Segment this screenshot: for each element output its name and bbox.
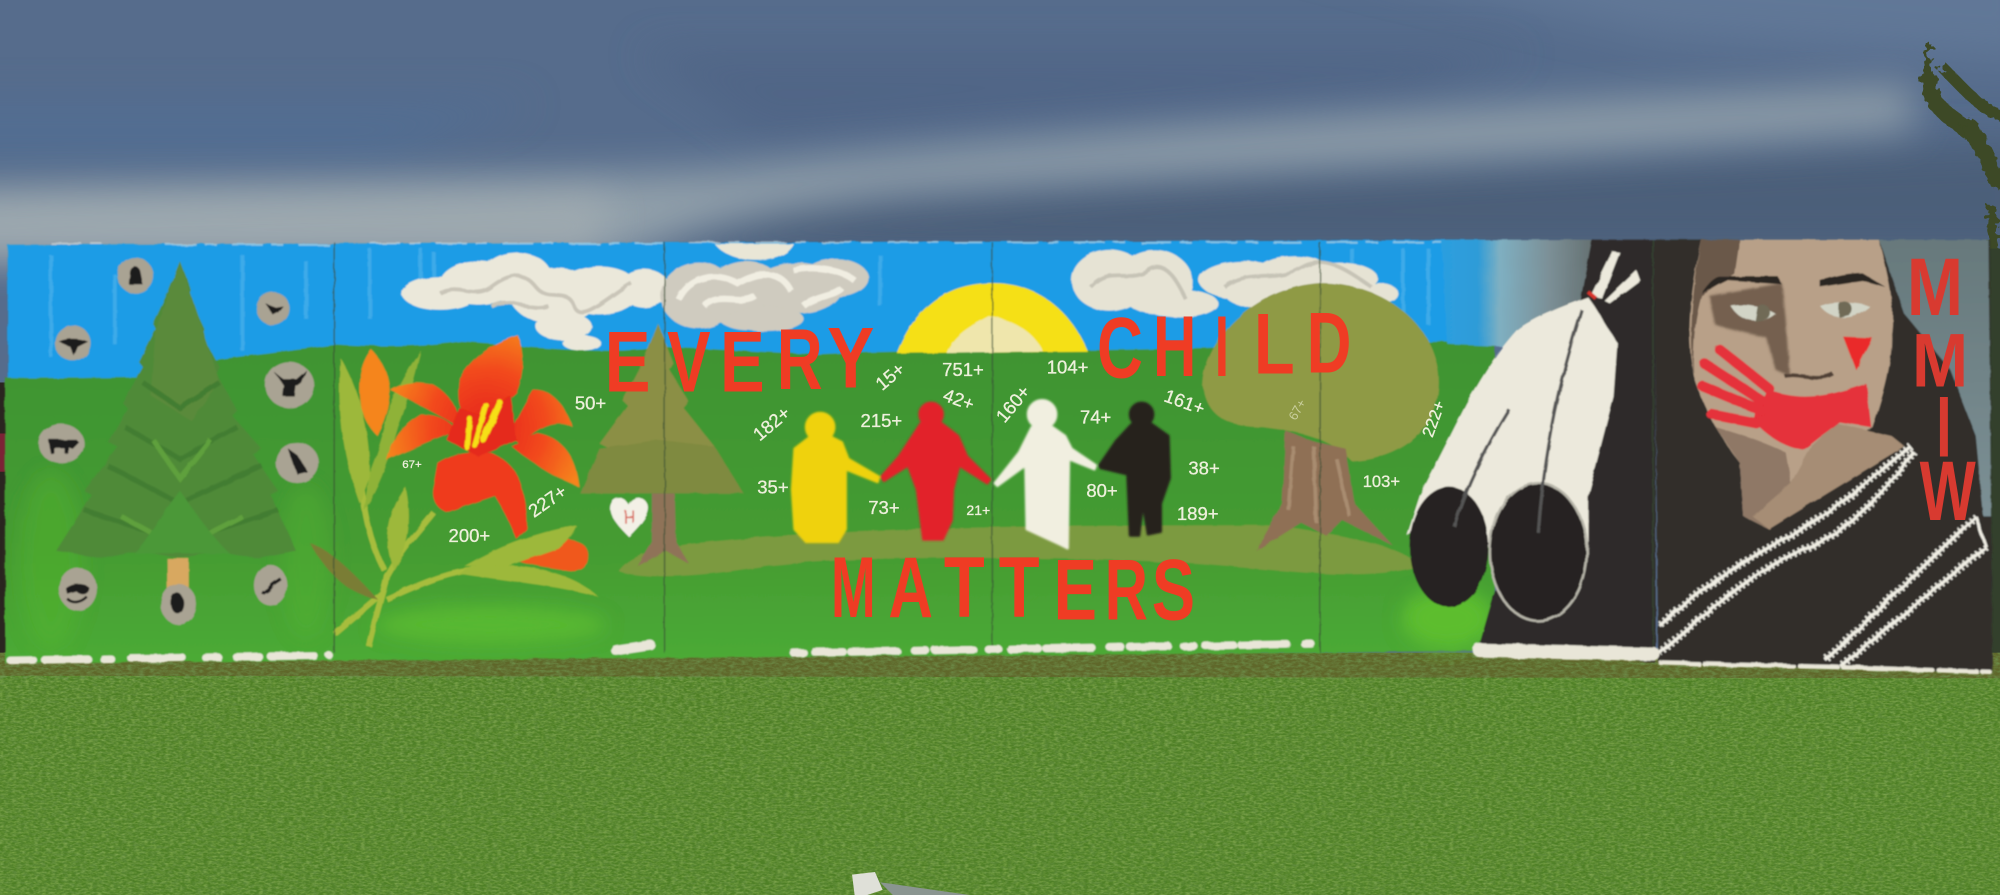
heading: EVERY: V <box>667 314 711 410</box>
bud left <box>359 349 390 436</box>
heading: EVERY: E <box>720 314 765 410</box>
petals <box>390 383 462 428</box>
animal badges <box>38 258 319 625</box>
residential school numbers: 73+ <box>868 497 900 518</box>
badge: eagle <box>55 325 91 361</box>
hazy blue gray arc <box>1441 240 1607 347</box>
badge: snake <box>254 565 287 606</box>
heading: MATTERS: M <box>831 540 876 636</box>
heading: CHILD <box>1097 295 1351 396</box>
residential school numbers: 161+ <box>1161 385 1208 419</box>
residential school numbers: 74+ <box>1080 406 1111 427</box>
residential school numbers <box>402 357 1449 546</box>
panel seams <box>334 240 1653 660</box>
leaves <box>310 543 378 599</box>
heading: MATTERS: T <box>944 540 985 636</box>
painted ground <box>5 342 1495 663</box>
heading: CHILD: I <box>1215 299 1229 395</box>
heading: MMIW vertical: M <box>1912 318 1968 403</box>
badge: wolf <box>276 442 319 483</box>
heading: MATTERS: S <box>1152 543 1195 639</box>
heading: MMIW vertical: M <box>1907 242 1963 333</box>
sky background <box>0 0 2000 676</box>
heading: MATTERS: A <box>888 540 933 636</box>
spruce tree <box>56 261 296 592</box>
heading: EVERY: E <box>605 314 651 410</box>
residential school numbers: 21+ <box>966 502 990 518</box>
heading: MMIW vertical: W <box>1920 444 1976 538</box>
badge: bell <box>117 258 153 293</box>
heading: EVERY: R <box>777 312 823 408</box>
residential school numbers: 50+ <box>575 392 606 413</box>
residential school numbers: 103+ <box>1363 472 1400 491</box>
cloud top small <box>714 244 793 260</box>
residential school numbers: 42+ <box>941 384 977 415</box>
broadleaf tree <box>1203 283 1439 551</box>
bright green patches <box>18 472 1494 650</box>
stamens <box>467 403 500 448</box>
lawn <box>0 653 2000 895</box>
covering hand <box>1753 423 1904 529</box>
residential school numbers: 215+ <box>861 410 902 431</box>
sky brush streaks <box>51 249 1429 357</box>
badge: bird <box>256 292 290 325</box>
residential school numbers: 189+ <box>1177 503 1219 524</box>
residential school numbers: 160+ <box>991 381 1034 426</box>
clouds <box>402 244 1398 351</box>
badge: fish <box>59 567 97 611</box>
heading: MATTERS <box>831 540 1195 639</box>
residential school numbers: 67+ <box>402 459 422 471</box>
stems <box>334 463 485 646</box>
residential school numbers: 35+ <box>757 476 789 497</box>
residential school numbers: 182+ <box>749 402 794 445</box>
figure: red <box>881 403 990 539</box>
residential school numbers: 80+ <box>1086 480 1118 501</box>
figure: yellow <box>792 413 879 542</box>
heading: MATTERS: T <box>999 540 1040 636</box>
eyebrows <box>1702 277 1782 293</box>
badge: deer <box>265 362 314 408</box>
residential school numbers: 227+ <box>524 480 570 521</box>
heading: EVERY <box>605 311 874 410</box>
white paint along base <box>10 644 1990 672</box>
face <box>1690 240 1893 529</box>
heading: MMIW vertical <box>1907 242 1976 538</box>
object on the lawn <box>852 872 969 895</box>
red hand print <box>1703 349 1871 450</box>
nose <box>1784 374 1833 377</box>
cloud right <box>1071 250 1398 317</box>
dark feather panel <box>1480 240 1656 663</box>
heading: MATTERS: R <box>1105 543 1148 639</box>
residential school numbers: 222+ <box>1418 398 1449 440</box>
olive spruce tree <box>580 324 1422 576</box>
painted sky <box>8 240 1480 382</box>
background tree top right <box>1926 46 2000 261</box>
heading: CHILD: D <box>1307 295 1351 391</box>
ground mound <box>619 525 1422 576</box>
residential school numbers: 67+ <box>1285 396 1309 423</box>
neck <box>1716 427 1791 529</box>
residential school numbers: 38+ <box>1188 457 1220 478</box>
trunk <box>638 493 689 566</box>
heading: CHILD: H <box>1153 299 1196 395</box>
silhouette figures holding hands <box>792 400 1170 548</box>
badge: bison <box>38 424 84 463</box>
heading: CHILD: C <box>1097 300 1143 396</box>
eagle feathers <box>1407 251 1640 621</box>
orange lily <box>310 335 598 646</box>
heading: MMIW vertical: I <box>1936 379 1952 475</box>
residential school numbers: 15+ <box>871 358 909 394</box>
top edge paint <box>51 242 1480 245</box>
cloud left <box>402 252 670 351</box>
eyes <box>1731 305 1776 321</box>
residential school numbers: 104+ <box>1047 357 1088 378</box>
mural wall <box>5 240 1992 673</box>
hair shade forehead <box>1691 240 1740 376</box>
badge: beetle <box>161 584 196 625</box>
heading: EVERY: Y <box>827 311 874 407</box>
cloud centre <box>661 259 869 331</box>
heading: CHILD: L <box>1254 297 1295 393</box>
residential school numbers: 200+ <box>449 525 490 546</box>
figure: white <box>995 400 1096 548</box>
residential school numbers: 751+ <box>942 359 984 380</box>
heading: MATTERS: E <box>1054 543 1097 639</box>
sun <box>897 283 1088 353</box>
heart <box>610 498 648 537</box>
dark edges behind wall <box>0 249 2000 676</box>
cheek mark <box>1843 337 1872 370</box>
figure: black <box>1099 403 1170 535</box>
woman panel <box>1654 240 1992 673</box>
eye shadow <box>1709 283 1790 376</box>
bud lower right <box>511 539 588 571</box>
feather tips <box>1591 251 1640 303</box>
garment trim <box>1659 446 1986 667</box>
sky corner <box>1879 240 1991 516</box>
